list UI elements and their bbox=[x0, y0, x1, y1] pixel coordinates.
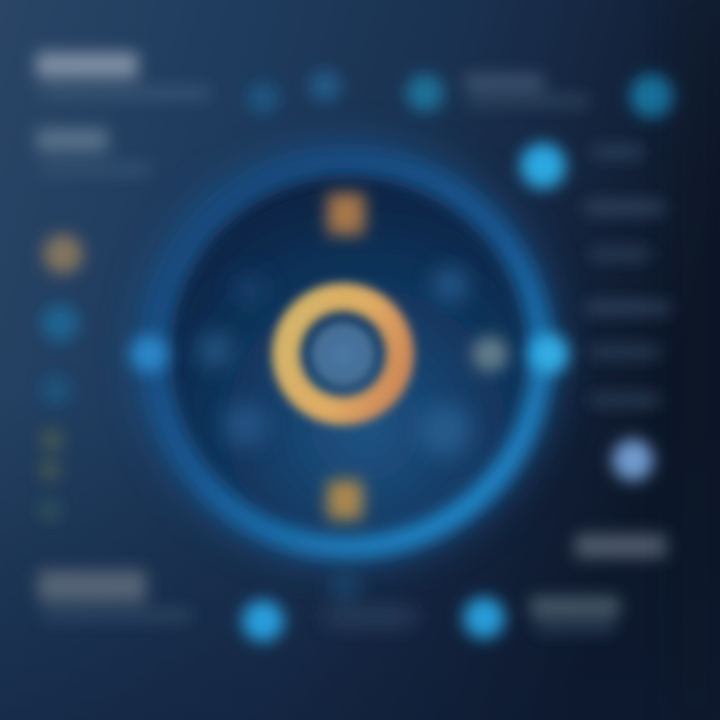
left column icons bbox=[40, 234, 83, 520]
top icons row bbox=[247, 70, 674, 118]
central dial bbox=[130, 161, 569, 547]
bottom nodes bbox=[242, 597, 505, 642]
node: bottom orange bbox=[327, 480, 363, 520]
node: left bbox=[130, 335, 168, 373]
inner detail marks bbox=[197, 267, 471, 456]
top text label bbox=[464, 74, 588, 106]
bottom centre text bbox=[325, 573, 415, 624]
inner disc bbox=[168, 174, 528, 534]
outer ring glow bbox=[148, 154, 548, 554]
pale node right bbox=[612, 439, 654, 481]
lower left text bbox=[38, 570, 192, 620]
node: right bbox=[529, 334, 569, 374]
lower right text bbox=[530, 534, 667, 633]
blue ring bbox=[155, 161, 541, 547]
node: right grey bbox=[472, 336, 508, 372]
right column text bbox=[585, 146, 670, 406]
gold ring bbox=[286, 297, 400, 411]
node: top orange bbox=[327, 193, 365, 235]
heading: top left block bbox=[36, 52, 210, 174]
centre hub bbox=[312, 323, 374, 385]
bright node upper right bbox=[520, 143, 566, 189]
right edge darkening bbox=[670, 0, 720, 720]
